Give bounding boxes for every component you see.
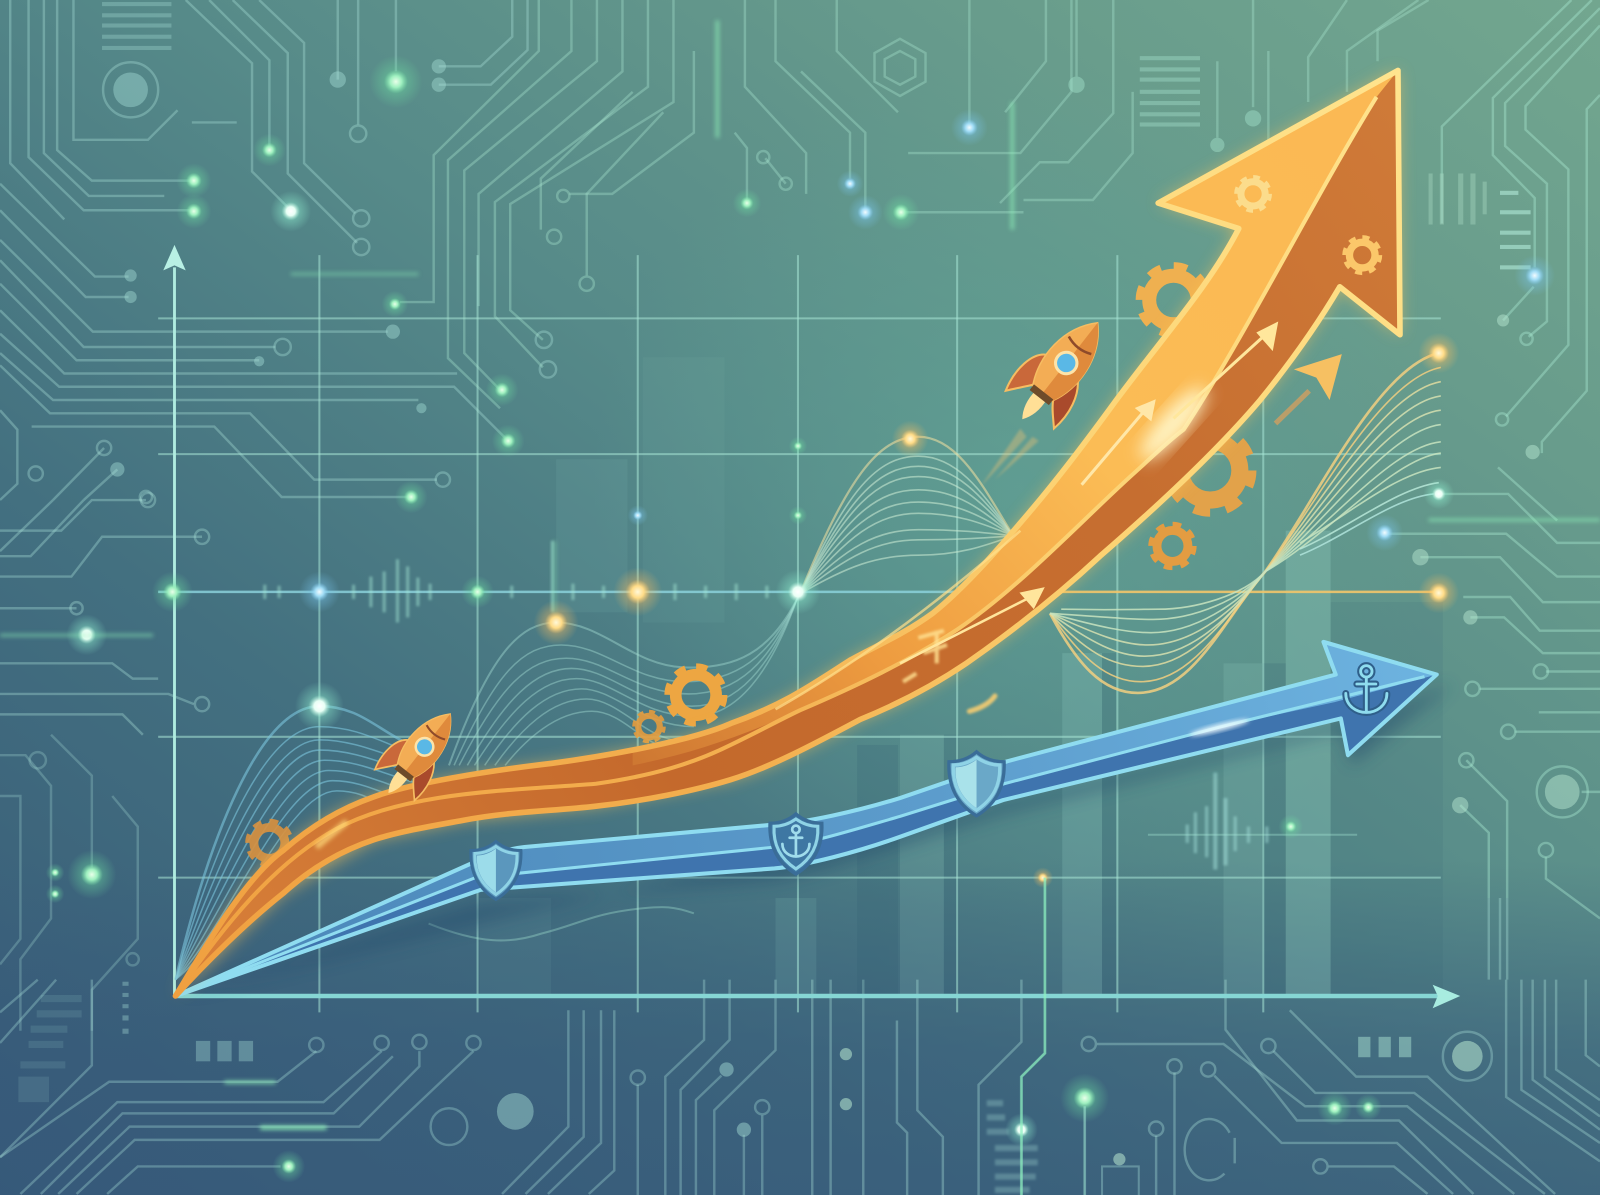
gear: behind curve small: [634, 712, 664, 741]
green circuit line: bottom: [1021, 878, 1045, 1195]
orange arrow lens flare: [1132, 380, 1215, 467]
anchor in blue arrow head: [1346, 666, 1387, 712]
comb stripes: bottom: [987, 1100, 1038, 1193]
gear on arrow head left: [1237, 177, 1270, 210]
circuit traces: left lower: [0, 735, 139, 1031]
orange arrow centre line: [176, 97, 1377, 996]
gear on arrow head right: [1345, 238, 1380, 273]
x axis: [174, 985, 1460, 1008]
lower right signal: [1148, 773, 1357, 869]
orange arrow upper bright sheet: [633, 70, 1398, 765]
circuit traces: top centre: [400, 0, 1429, 408]
chip blocks: bottom right: [1358, 1037, 1411, 1057]
wave fan: pale centre: [800, 437, 1013, 594]
vent stripes: top right: [1140, 56, 1200, 127]
blue arrow outline: [176, 642, 1437, 996]
small arrow on curve: middle: [1082, 400, 1155, 485]
orange arrow body: [176, 70, 1400, 996]
blue arrow shadow: [176, 684, 1454, 996]
vent bars: right: [1429, 173, 1487, 225]
dark background bars: [857, 602, 1443, 995]
gear: upper behind arrow: [1140, 267, 1207, 333]
wave fan: teal centre left: [449, 597, 798, 765]
vent stripes: bottom left: [18, 995, 82, 1102]
small arrow on curve: top: [1173, 322, 1278, 418]
small arrow on curve: lower: [900, 588, 1044, 663]
glow line: node bottom: [1083, 1106, 1086, 1195]
rocket upper exhaust: [981, 429, 1039, 487]
chart grid: [158, 255, 1441, 1012]
faint trend under blue arrow: [429, 907, 694, 940]
circuit discs: bottom right: [840, 1041, 1483, 1165]
blue arrow body: [176, 642, 1437, 996]
vent stripes: top left: [102, 2, 171, 50]
circuit discs: right: [1412, 314, 1580, 813]
gear: lower left: [248, 822, 291, 864]
rocket: upper: [996, 302, 1123, 439]
circuit discs: bottom left: [497, 1062, 751, 1137]
glowing nodes: green: [46, 55, 1382, 1183]
circuit traces: bottom right: [812, 898, 1600, 1195]
blue arrow centre line: [176, 677, 1424, 996]
glowing nodes: blue: [299, 109, 1555, 612]
blue arrow highlight: [1189, 717, 1250, 738]
circuit traces: bottom left: [0, 980, 776, 1195]
shield: right: [949, 752, 1004, 816]
circuit discs: top centre: [1068, 77, 1261, 152]
faded marks on curve: [903, 631, 947, 682]
blue arrow: [176, 642, 1454, 996]
axis tick dots: left: [122, 982, 129, 1034]
background bars: [480, 357, 1331, 995]
shield: left: [471, 841, 521, 899]
glowing nodes: gold and white: [295, 333, 1459, 888]
thin line inside bright band: [776, 531, 1020, 709]
y axis: [163, 245, 186, 996]
wave fan: gold right: [1050, 353, 1441, 693]
blue arrow upper facet: [176, 642, 1437, 996]
small gold mark: [969, 696, 995, 711]
circuit traces: top left: [0, 0, 556, 735]
midline signal: [158, 541, 1441, 623]
circuit discs: top left: [110, 59, 446, 477]
gear: right of arrow large: [1170, 430, 1251, 511]
streak on curve: [316, 821, 347, 847]
gear: right of arrow small: [1151, 525, 1194, 567]
rocket: lower: [367, 697, 471, 809]
orange arrow: [176, 70, 1400, 996]
shield: anchor: [770, 814, 822, 874]
orange arrow glow: [176, 70, 1400, 996]
small detached arrow: [1276, 354, 1342, 424]
gear: behind curve large: [668, 667, 723, 723]
orange arrow outline: [176, 70, 1400, 996]
circuit traces: right: [1385, 0, 1600, 918]
wave fan: blue left: [176, 706, 434, 980]
chip blocks: bottom left: [196, 1041, 253, 1061]
vent stripes: right: [1500, 191, 1531, 269]
